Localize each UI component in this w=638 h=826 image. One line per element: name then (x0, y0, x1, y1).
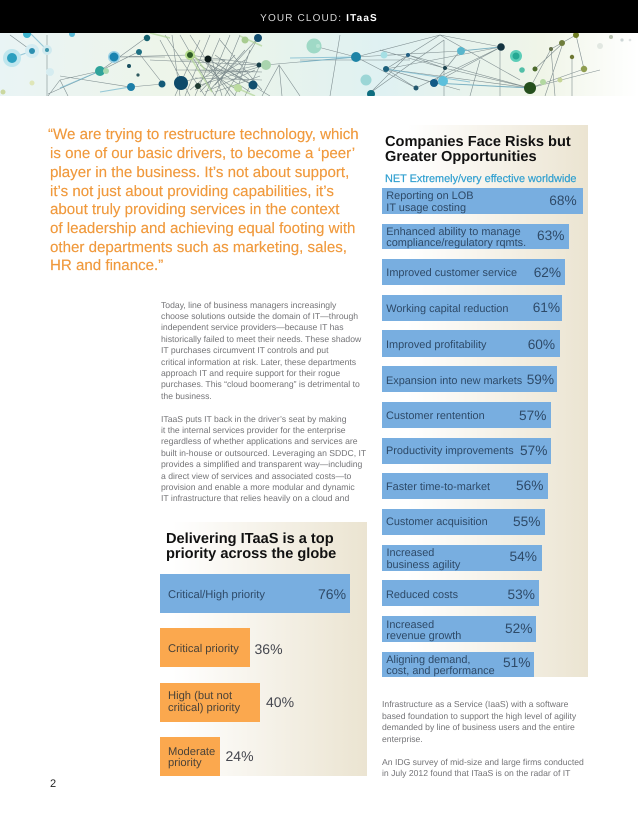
heading: Delivering ITaaS: priority across the globe (166, 546, 336, 562)
body text right column: An IDG survey of mid-size and large firms conducted (382, 756, 584, 766)
heading: Companies Face Risks: Greater Opportunities (385, 148, 537, 164)
bar: productivity 57% (382, 438, 551, 464)
bar: acquisition 55%: 55% (513, 514, 540, 528)
heading: Delivering ITaaS: Delivering ITaaS is a top (166, 531, 334, 547)
bar: productivity 57%: 57% (520, 443, 547, 458)
bar: revenue growth 52% (382, 616, 536, 642)
pull quote: of leadership and achieving equal footing with (50, 220, 355, 237)
bar: acquisition 55% (382, 509, 545, 535)
bar: customer service 62%: 62% (534, 264, 561, 280)
bar: reporting 68%: 68% (549, 193, 577, 208)
bar: agility 54% (382, 545, 542, 571)
heading: Companies Face Risks (385, 134, 571, 164)
bar: moderate 24%: priority (168, 757, 202, 769)
body text column: critical information at risk. Later, these departments (161, 357, 356, 367)
body text column: ITaaS puts IT back in the driver’s seat by making (161, 414, 347, 424)
bar: reduced costs 53% (382, 580, 539, 606)
bar: moderate 24% (160, 737, 220, 776)
bar: reduced costs 53%: Reduced costs (386, 589, 458, 601)
bar: critical/high 76% (160, 574, 350, 613)
body text column: IT purchases circumvent IT controls and put (161, 345, 328, 355)
bar: reduced costs 53%: 53% (507, 586, 535, 602)
value: 24%: 24% (226, 748, 254, 764)
page number: 2 (50, 778, 56, 790)
bar: compliance 63% (382, 224, 569, 249)
pull quote: it’s not just about providing capabilities, it’s (50, 182, 334, 200)
body text column: choose solutions outside the domain of IT—through (161, 311, 358, 321)
bar: critical 36%: Critical priority (168, 643, 239, 655)
bar: high 40%: critical) priority (168, 702, 240, 714)
body text right column: enterprise. (382, 734, 423, 744)
bar: acquisition 55%: Customer acquisition (386, 516, 488, 528)
value: 36%: 36% (254, 640, 283, 656)
body text right column: Infrastructure as a Service (IaaS) with a software (382, 699, 568, 709)
pull quote: “We are trying to restructure technology, which (48, 126, 359, 143)
body text column: purchases. This “cloud boomerang” is detrimental to (161, 379, 360, 389)
subheading: NET Extremely/very effective worldwide (385, 173, 576, 185)
bar: reporting 68%: IT usage costing (386, 202, 466, 214)
bar: high 40% (160, 683, 260, 722)
body text column: Today, line of business managers increasingly (161, 300, 336, 310)
body text column (161, 300, 366, 503)
bar: aligning demand 51% (382, 652, 534, 677)
bar: high 40%: High (but not (168, 690, 232, 702)
body text column: approach IT and require support for their rogue (161, 368, 340, 378)
bar: revenue growth 52%: Increased (386, 619, 434, 631)
panel: risks and opportunities chart (376, 125, 588, 677)
body text column: it the internal services provider for the enterprise (161, 425, 346, 435)
bar: aligning demand 51%: cost, and performance (386, 665, 495, 677)
body text column: regardless of whether applications and services are (161, 436, 358, 446)
header band: YOUR CLOUD: ITaaS (260, 13, 378, 24)
body text right column: based foundation to support the high level of agility (382, 710, 576, 720)
bar: customer service 62%: Improved customer service (386, 267, 517, 279)
bar: revenue growth 52%: revenue growth (386, 630, 461, 642)
body text right column: demanded by line of business users and the entire (382, 722, 575, 732)
bar: moderate 24%: Moderate (168, 746, 215, 758)
bar: working capital 61%: Working capital reduction (386, 303, 508, 315)
body text right column (382, 699, 584, 778)
bar: time-to-market 56%: 56% (516, 478, 543, 493)
bar: profitability 60%: Improved profitability (386, 339, 486, 351)
bar: agility 54%: 54% (509, 549, 537, 564)
body text column: a direct view of services and associated costs—to (161, 471, 351, 481)
bar: working capital 61%: 61% (533, 300, 560, 315)
bar: time-to-market 56% (382, 473, 548, 499)
pull quote: is one of our basic drivers, to become a ‘peer’ (50, 145, 355, 162)
value: 40%: 40% (266, 694, 294, 710)
header band (0, 0, 638, 34)
body text column: built in-house or outsourced. Leveraging an SDDC, IT (161, 448, 366, 458)
bar: working capital 61% (382, 295, 562, 320)
heading: Delivering ITaaS (166, 531, 336, 562)
body text column: provision and enable a more modular and dynamic (161, 482, 355, 492)
bar: compliance 63%: Enhanced ability to manage (386, 226, 521, 238)
bar: aligning demand 51%: Aligning demand, (386, 654, 470, 666)
bar: agility 54%: business agility (386, 559, 460, 571)
bar: new markets 59% (382, 366, 557, 392)
bar: time-to-market 56%: Faster time-to-market (386, 481, 490, 493)
body text column: IT infrastructure that relies heavily on a cloud and (161, 493, 349, 503)
body text right column: in July 2012 found that ITaaS is on the radar of IT (382, 768, 570, 778)
bar: revenue growth 52%: 52% (505, 621, 532, 636)
pull quote (48, 126, 359, 274)
bar: compliance 63%: 63% (537, 228, 564, 243)
body text column: independent service providers—because IT has (161, 322, 344, 332)
bar: retention 57%: 57% (519, 408, 546, 422)
bar: profitability 60%: 60% (528, 336, 555, 352)
network banner (0, 33, 638, 96)
bar: retention 57% (382, 402, 551, 428)
body text column: historically failed to meet their needs. These shadow (161, 334, 361, 344)
body text column: provides a simplified and transparent way—including (161, 459, 362, 469)
bar: critical/high 76%: 76% (318, 586, 346, 602)
pull quote: HR and finance.” (50, 257, 163, 274)
panel: ITaaS priority chart (146, 522, 367, 776)
bar: new markets 59%: Expansion into new markets (386, 375, 522, 387)
pull quote: player in the business. It’s not about support, (50, 164, 349, 180)
bar: compliance 63%: compliance/regulatory rqmts. (386, 237, 526, 249)
bar: reporting 68% (382, 188, 583, 214)
heading: Companies Face Risks: Companies Face Risks but (385, 134, 571, 150)
bar: aligning demand 51%: 51% (503, 655, 530, 670)
bar: retention 57%: Customer rentention (386, 410, 485, 422)
bar: profitability 60% (382, 330, 560, 356)
pull quote: about truly providing services in the context (50, 201, 339, 218)
bar: new markets 59%: 59% (527, 372, 554, 387)
bar: reporting 68%: Reporting on LOB (386, 190, 473, 202)
bar: agility 54%: Increased (386, 547, 434, 559)
pull quote: other departments such as marketing, sales, (50, 238, 347, 256)
bar: critical/high 76%: Critical/High priority (168, 589, 265, 601)
bar: critical 36% (160, 628, 250, 667)
bar: productivity 57%: Productivity improvements (386, 445, 514, 457)
body text column: the business. (161, 391, 212, 401)
bar: customer service 62% (382, 259, 565, 285)
